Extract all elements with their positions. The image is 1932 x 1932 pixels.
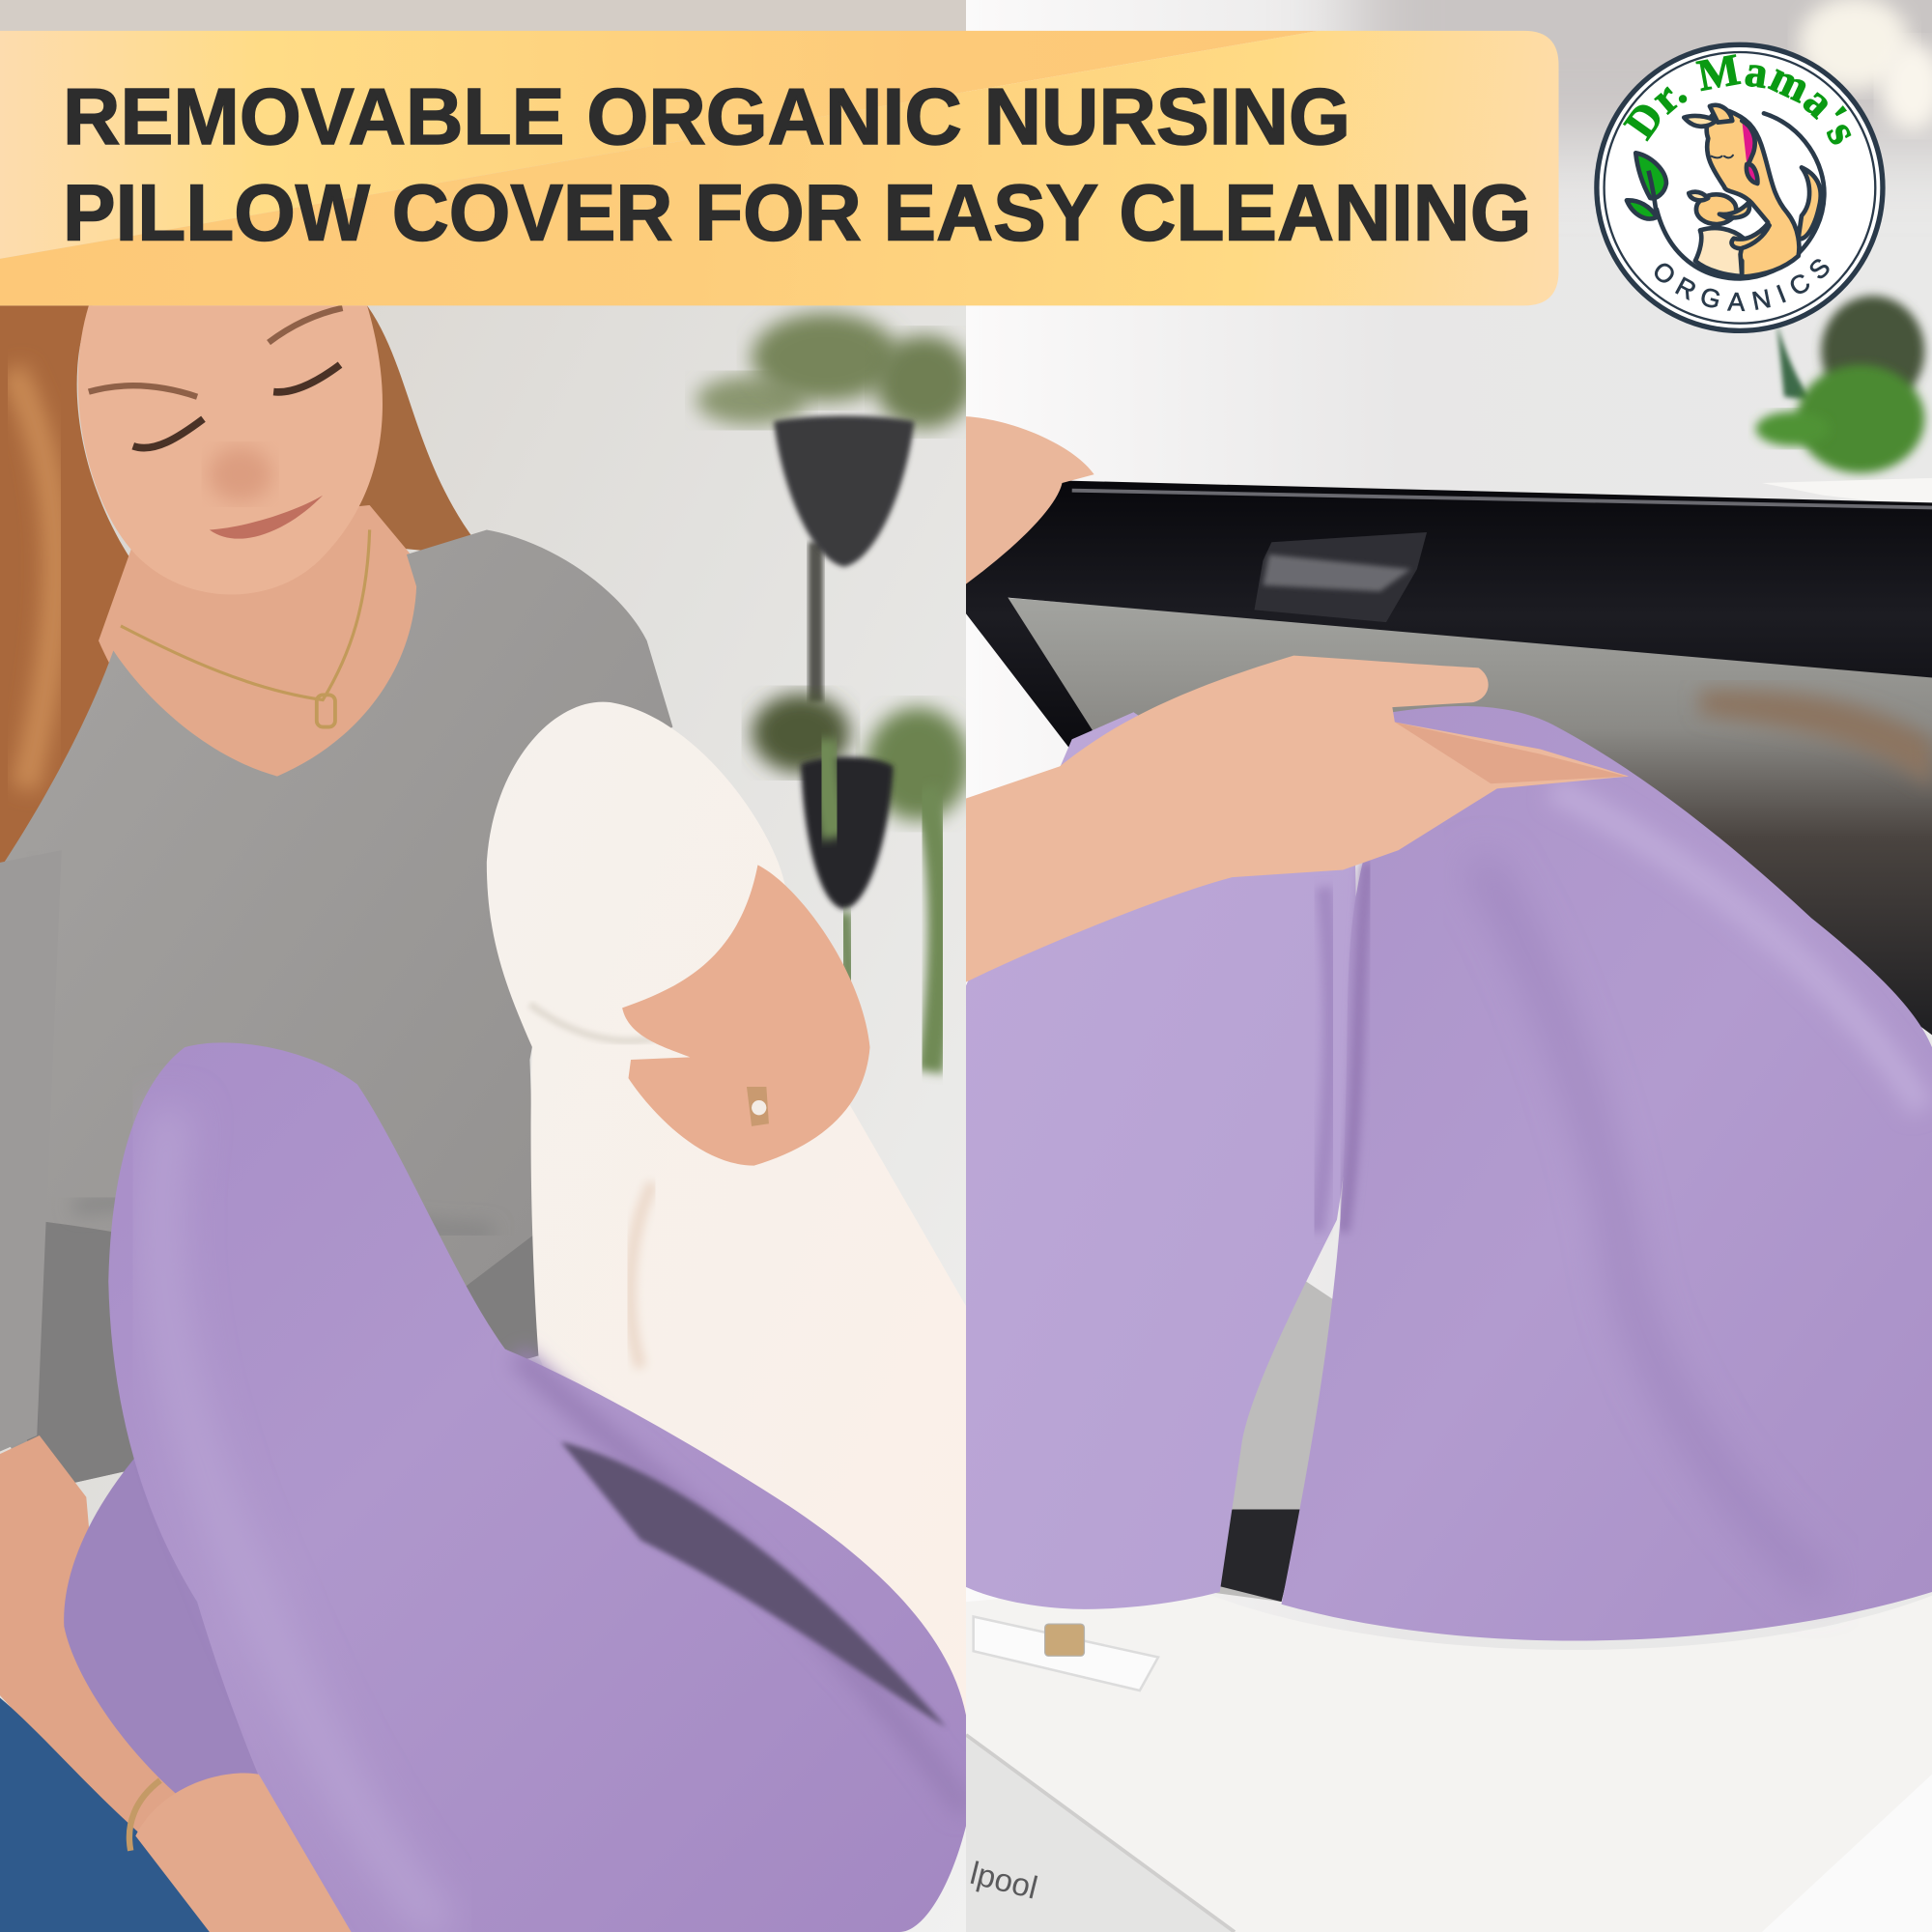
- cloth: front panel: [1282, 706, 1932, 1641]
- washer body: [966, 1282, 1932, 1932]
- hand on pillow: [622, 865, 870, 1166]
- cover zipper opening: [560, 1441, 947, 1727]
- logo text: [1648, 85, 1833, 147]
- left arm: [0, 1435, 176, 1832]
- heading: REMOVABLE ORGANIC NURSING: [63, 71, 1350, 161]
- cloth: back panel: [966, 712, 1356, 1609]
- orchid and potted plant: [1756, 0, 1932, 508]
- logo badge: [1594, 43, 1886, 333]
- hanging plants: [696, 313, 974, 1072]
- logo kangaroo illustration: [1657, 105, 1824, 278]
- hair: [0, 305, 488, 868]
- white pillow insert: [487, 702, 966, 1749]
- control panel: [974, 1616, 1158, 1690]
- banner: [0, 31, 1559, 305]
- hand under pillow: [135, 1774, 352, 1932]
- hand on lid: [966, 416, 1094, 584]
- jeans: [0, 1698, 210, 1932]
- hand lifting cloth: [966, 656, 1629, 982]
- photo panel: cover going into washer: [966, 0, 1932, 1932]
- logo badge: ORGANICS: [1654, 259, 1830, 311]
- logo badge: Dr. Mama's: [1623, 54, 1851, 145]
- shirt: [0, 529, 672, 1493]
- heading: [63, 71, 1531, 258]
- neck and chest: [99, 505, 417, 777]
- purple pillow cover: [108, 1042, 966, 1932]
- photo panel: woman holding pillow: [0, 0, 974, 1932]
- washer lid frame: [966, 480, 1932, 752]
- purple pillow back lobe: [64, 1459, 259, 1793]
- necklace: [121, 529, 370, 727]
- bracelet: [129, 1780, 160, 1851]
- washer glass: [1005, 598, 1932, 1035]
- logo leaves: [1627, 153, 1666, 218]
- face: [78, 305, 383, 594]
- heading: PILLOW COVER FOR EASY CLEANING: [63, 168, 1531, 258]
- washer brand: lpool: [967, 1856, 1041, 1907]
- lid latch: [1254, 532, 1427, 622]
